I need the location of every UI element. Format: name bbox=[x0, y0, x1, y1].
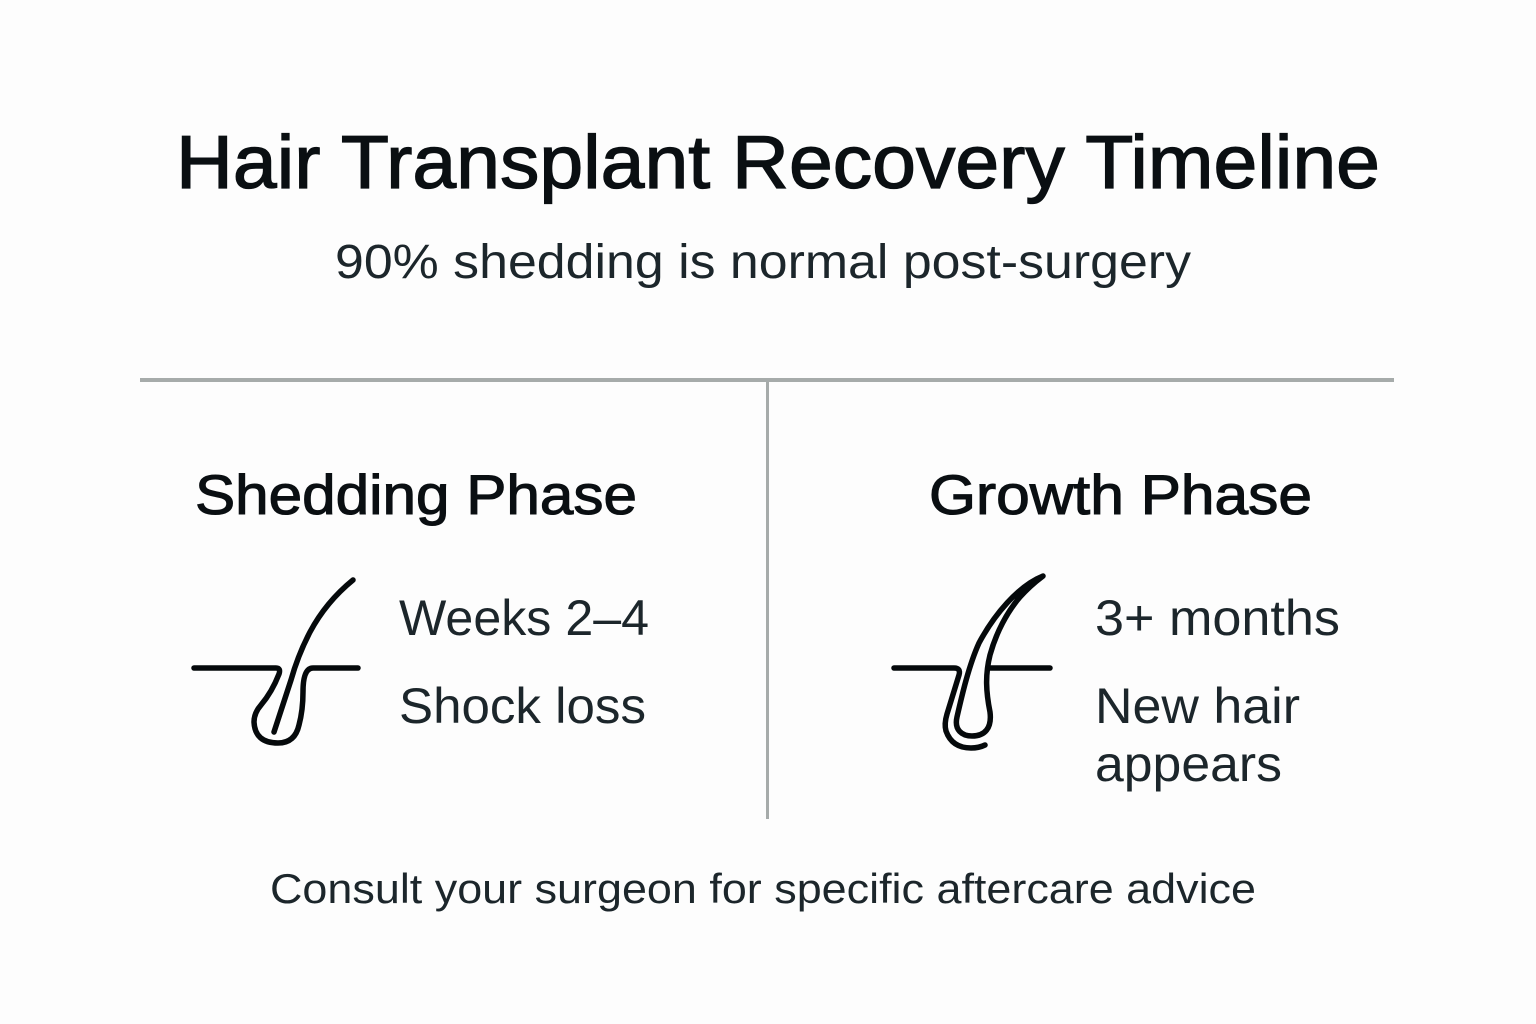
text: shock loss: Shock loss bbox=[399, 678, 646, 734]
text: new hair appears bbox=[1095, 678, 1300, 792]
icon: growing hair follicle bbox=[894, 576, 1050, 748]
panel: growth phase bbox=[894, 463, 1340, 792]
text: weeks 2-4: Weeks 2–4 bbox=[399, 590, 649, 646]
text: new hair appears: New hair bbox=[1095, 678, 1300, 734]
text: 3+ months: 3+ months bbox=[1095, 590, 1340, 646]
footer note: Consult your surgeon for specific aftercare advice bbox=[270, 865, 1256, 912]
icon: shedding hair follicle bbox=[194, 580, 358, 743]
title: Hair Transplant Recovery Timeline bbox=[176, 120, 1380, 204]
panel: shedding phase bbox=[194, 463, 649, 743]
text: new hair appears: appears bbox=[1095, 736, 1282, 792]
heading: shedding phase: Shedding Phase bbox=[195, 463, 637, 526]
horizontal divider bbox=[140, 378, 1394, 382]
subtitle: 90% shedding is normal post-surgery bbox=[335, 236, 1191, 289]
vertical divider bbox=[766, 382, 769, 819]
heading: growth phase: Growth Phase bbox=[929, 463, 1312, 526]
